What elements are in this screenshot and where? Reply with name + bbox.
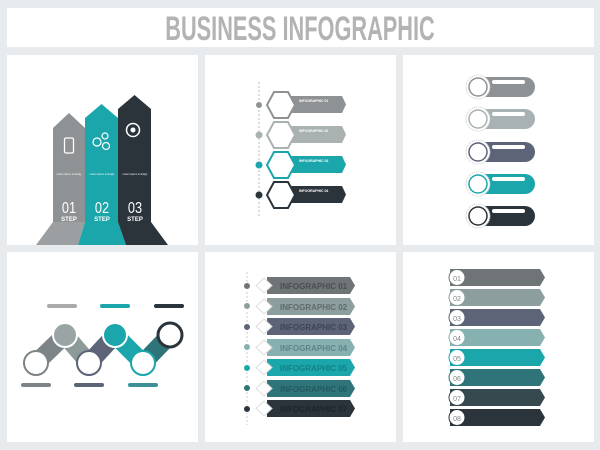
arrow 03: Lorem Ipsum is simply: [123, 173, 148, 176]
panel: arrow list: INFOGRAPHIC 02: [280, 303, 348, 312]
panel: numbered bars: 07: [453, 396, 461, 403]
panel: numbered bars: 08: [453, 416, 461, 423]
arrow 02: 02: [95, 200, 109, 217]
title: BUSINESS INFOGRAPHIC: [165, 10, 435, 48]
arrow 02: [78, 104, 126, 245]
title: [7, 8, 594, 48]
arrow 01: STEP: [61, 217, 77, 223]
panel: arrow list: [205, 252, 396, 442]
panel: numbered bars: 06: [453, 376, 461, 383]
arrow 02: STEP: [94, 217, 110, 223]
panel: numbered bars: [403, 252, 594, 442]
panel: numbered bars: 03: [453, 316, 461, 323]
panel: arrow list: INFOGRAPHIC 06: [280, 385, 348, 394]
panel: numbered bars: 01: [453, 276, 461, 283]
arrow 03: 03: [128, 200, 142, 217]
panel: numbered bars: 02: [453, 296, 461, 303]
panel: numbered bars: 04: [453, 336, 461, 343]
panel: numbered bars: 05: [453, 356, 461, 363]
panel: pill list: [403, 55, 594, 245]
arrow 02: Lorem Ipsum is simply: [90, 173, 115, 176]
arrow 01: [36, 113, 85, 245]
panel: step arrows: [7, 55, 198, 245]
panel: hexagon list: INFOGRAPHIC 04: [299, 189, 328, 193]
panel: arrow list: INFOGRAPHIC 07: [280, 405, 348, 414]
panel: arrow list: INFOGRAPHIC 03: [280, 323, 348, 332]
panel: zigzag: [7, 252, 198, 442]
arrow 01: 01: [62, 200, 76, 217]
panel: arrow list: INFOGRAPHIC 01: [280, 282, 348, 291]
panel: hexagon list: [205, 55, 396, 245]
panel: arrow list: INFOGRAPHIC 05: [280, 364, 348, 373]
panel: hexagon list: INFOGRAPHIC 01: [299, 99, 328, 103]
arrow 01: Lorem Ipsum is simply: [57, 173, 82, 176]
arrow 03: [118, 95, 168, 245]
panel: hexagon list: INFOGRAPHIC 02: [299, 129, 328, 133]
arrow 03: STEP: [127, 217, 143, 223]
panel: arrow list: INFOGRAPHIC 04: [280, 344, 348, 353]
panel: hexagon list: INFOGRAPHIC 03: [299, 159, 328, 163]
